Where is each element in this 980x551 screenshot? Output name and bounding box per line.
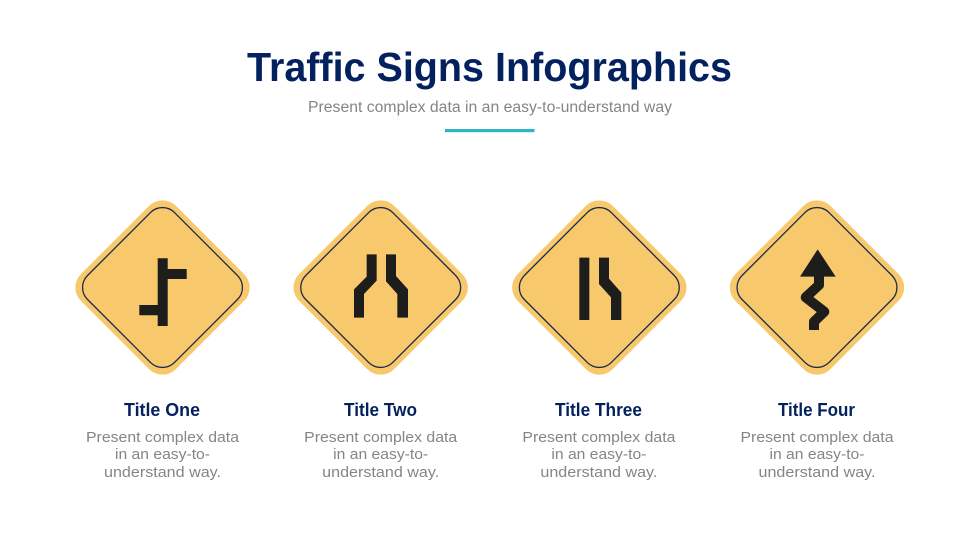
panel: sign three	[504, 192, 694, 481]
icon: side roads warning sign	[67, 192, 258, 383]
text block: description two: in an easy-to-	[333, 446, 428, 463]
heading: title one: Title One	[124, 400, 200, 420]
text block: description three: in an easy-to-	[551, 446, 646, 463]
header	[247, 44, 732, 132]
heading: title four: Title Four	[778, 400, 855, 420]
heading: title two: Title Two	[344, 400, 417, 420]
heading: title three: Title Three	[555, 400, 642, 420]
subtitle: Present complex data in an easy-to-understand way	[308, 99, 672, 116]
text block: description one	[86, 429, 240, 481]
text block: description four: in an easy-to-	[770, 446, 864, 463]
text block: description one: understand way.	[104, 464, 221, 481]
text block: description four: understand way.	[758, 464, 876, 481]
panel: sign four	[722, 192, 912, 481]
panel: sign two	[286, 192, 476, 481]
text block: description one: Present complex data	[86, 429, 240, 446]
accent bar	[445, 129, 534, 132]
text block: description one: in an easy-to-	[115, 446, 210, 463]
text block: description three	[522, 429, 676, 481]
text block: description four: Present complex data	[740, 429, 894, 446]
text block: description four	[740, 429, 894, 481]
icon: winding road arrow sign	[722, 192, 912, 383]
panel: sign one	[67, 192, 258, 481]
text block: description two: understand way.	[322, 464, 439, 481]
text block: description three: understand way.	[540, 464, 657, 481]
icon: road narrows both sides sign	[286, 192, 476, 383]
icon: lane narrows right sign	[504, 192, 694, 383]
text block: description two	[304, 429, 458, 481]
title: Traffic Signs Infographics	[247, 44, 732, 90]
text block: description three: Present complex data	[522, 429, 676, 446]
text block: description two: Present complex data	[304, 429, 458, 446]
